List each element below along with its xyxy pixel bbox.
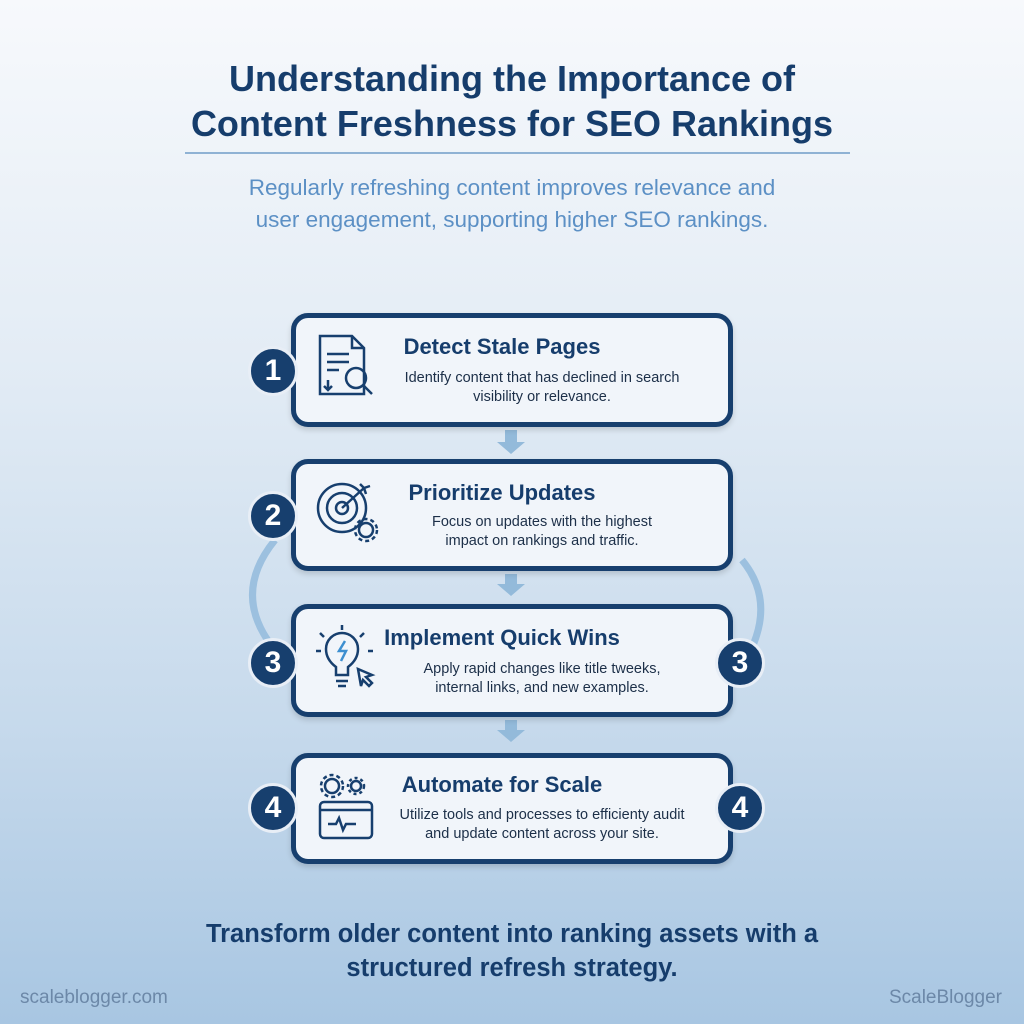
title	[191, 58, 833, 144]
footer left: scaleblogger.com	[20, 987, 168, 1008]
card 1: visibility or relevance.	[473, 389, 611, 405]
card 2: Focus on updates with the highest	[432, 514, 652, 530]
number 1	[248, 346, 298, 396]
number 4 left: 4	[265, 791, 281, 824]
bottom tagline	[206, 920, 818, 982]
icon: document search	[318, 334, 373, 396]
number 4 right	[715, 783, 765, 833]
card 2	[291, 459, 733, 571]
subtitle: Regularly refreshing content improves relevance and	[249, 175, 775, 200]
number 3 left: 3	[265, 646, 281, 679]
icon: automation	[318, 774, 374, 840]
subtitle	[249, 175, 775, 232]
card 4: Automate for Scale	[402, 772, 602, 797]
card 3	[291, 604, 733, 717]
card 1: Detect Stale Pages	[404, 334, 600, 359]
number 4 left	[248, 783, 298, 833]
number 3 right: 3	[732, 646, 748, 679]
number 3 left	[248, 638, 298, 688]
card 2: impact on rankings and traffic.	[445, 533, 639, 549]
card 1: Identify content that has declined in search	[405, 370, 679, 386]
number 4 right: 4	[732, 791, 748, 824]
number 3 right	[715, 638, 765, 688]
number 1: 1	[265, 354, 281, 387]
bottom tagline: Transform older content into ranking assets with a	[206, 920, 818, 948]
title: Understanding the Importance of	[229, 58, 795, 99]
card 3: internal links, and new examples.	[435, 680, 649, 696]
icon: lightbulb	[316, 625, 376, 688]
card 4: Utilize tools and processes to efficienty audit	[399, 807, 685, 823]
footer right: ScaleBlogger	[889, 987, 1002, 1008]
card 2: Prioritize Updates	[408, 480, 596, 505]
arrows	[497, 430, 525, 742]
card 1	[291, 313, 733, 427]
title: Content Freshness for SEO Rankings	[191, 103, 833, 144]
icon: target	[316, 482, 378, 542]
bottom tagline: structured refresh strategy.	[346, 954, 678, 982]
card 4: and update content across your site.	[425, 826, 659, 842]
subtitle: user engagement, supporting higher SEO rankings.	[256, 207, 768, 232]
card 3: Apply rapid changes like title tweeks,	[424, 661, 660, 677]
card 3: Implement Quick Wins	[384, 625, 620, 650]
number 2	[248, 491, 298, 541]
card 4	[291, 753, 733, 864]
number 2: 2	[265, 499, 281, 532]
